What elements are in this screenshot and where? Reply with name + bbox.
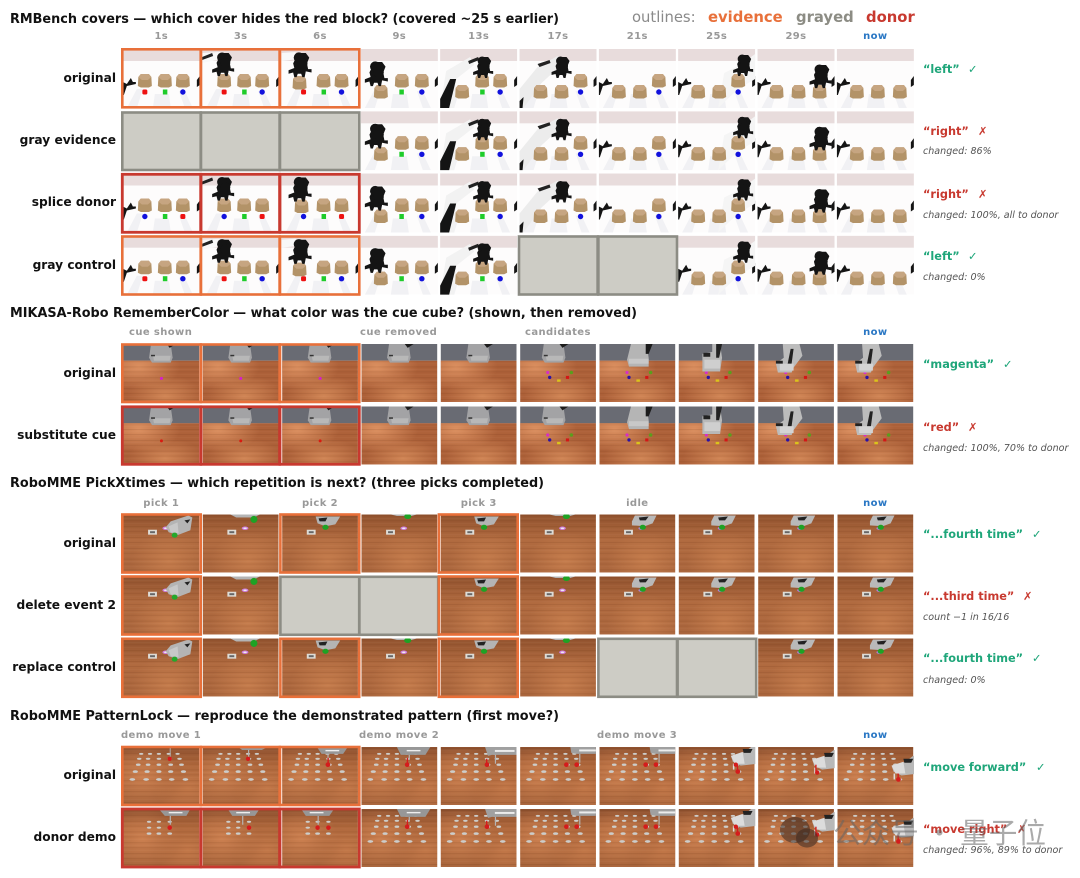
row: original: original [63,536,116,550]
row: gray evidence: “right” [923,125,969,138]
legend: outlines: evidence [708,9,783,26]
row: gray evidence [20,111,992,170]
row: donor demo: “move right” [923,823,1007,836]
row: delete event 2 [17,576,1032,635]
row: original: ✓ [1036,761,1045,774]
row: gray control [33,236,986,295]
timeline labels: cue shown [129,327,192,338]
row: original: original [63,768,116,782]
row: replace control [12,638,1041,697]
row: replace control: changed: 0% [923,675,986,686]
row: substitute cue: substitute cue [17,428,116,442]
timeline labels: 25s [706,31,727,42]
timeline labels [121,730,888,741]
title: MIKASA-Robo: MIKASA-Robo RememberColor — what color was the cue cube? (shown, then removed) [10,306,637,321]
timeline labels: demo move 2 [359,730,439,741]
panel: MIKASA-Robo RememberColor [10,306,1069,464]
row: splice donor: “right” [923,188,969,201]
row: original: ✓ [1003,358,1012,371]
timeline labels: 9s [392,31,406,42]
row: original: original [63,366,116,380]
row: original [63,514,1041,572]
row: original [63,49,977,108]
legend: outlines [632,9,915,26]
row: gray control: gray control [33,258,116,272]
row: delete event 2: ✗ [1023,590,1032,603]
timeline labels [143,498,888,509]
row: gray evidence: ✗ [978,125,987,138]
timeline labels: 3s [234,31,248,42]
row: donor demo [34,808,1063,867]
row: delete event 2: count −1 in 16/16 [923,612,1009,623]
row: substitute cue: ✗ [968,421,977,434]
timeline labels: 6s [313,31,327,42]
timeline labels: candidates [525,327,591,338]
row: original: “...fourth time” [923,528,1023,541]
timeline labels: pick 1 [143,498,179,509]
row: original: “left” [923,63,960,76]
row: donor demo: ✗ [1017,823,1026,836]
row: replace control: “...fourth time” [923,652,1023,665]
timeline labels: idle [626,498,649,509]
row: splice donor: changed: 100%, all to donor [923,210,1059,221]
row: substitute cue: changed: 100%, 70% to donor [923,443,1069,454]
row: original: “move forward” [923,761,1026,774]
row: gray evidence: changed: 86% [923,146,992,157]
row: splice donor: ✗ [978,188,987,201]
timeline labels: demo move 1 [121,730,201,741]
row: replace control: ✓ [1032,652,1041,665]
row: gray control: changed: 0% [923,272,986,283]
timeline labels: now [863,730,888,741]
legend: outlines: outlines: [632,9,696,26]
row: gray control: “left” [923,250,960,263]
row: original: original [63,71,116,85]
timeline labels: 1s [154,31,168,42]
row: splice donor [32,174,1059,232]
timeline labels: cue removed [360,327,437,338]
panel: RoboMME PickXtimes [10,476,1041,697]
timeline labels: pick 2 [302,498,338,509]
legend: outlines: donor [866,9,915,26]
legend: outlines: grayed [796,9,854,26]
row: donor demo: donor demo [34,830,116,844]
timeline labels: 13s [468,31,489,42]
row: original: ✓ [1032,528,1041,541]
row: gray control: ✓ [968,250,977,263]
title: RMBench covers: RMBench covers — which cover hides the red block? (covered ~25 s earlier) [10,12,559,27]
row: original [63,746,1045,805]
row: original: “magenta” [923,358,994,371]
timeline labels: 17s [547,31,569,42]
timeline labels: now [863,498,888,509]
row: donor demo: changed: 96%, 89% to donor [923,845,1063,856]
row: delete event 2: delete event 2 [17,598,116,612]
row: original: ✓ [968,63,977,76]
row: splice donor: splice donor [32,195,116,209]
row: substitute cue: “red” [923,421,959,434]
timeline labels: now [863,31,888,42]
timeline labels: demo move 3 [597,730,677,741]
row: delete event 2: “...third time” [923,590,1014,603]
watermark: 公众号 · 量子位 [833,811,1046,852]
title: RoboMME PatternLock: RoboMME PatternLock — reproduce the demonstrated pattern (first move?) [10,709,559,724]
row: substitute cue [17,406,1069,464]
timeline labels [154,31,888,42]
row: gray evidence: gray evidence [20,133,116,147]
timeline labels: 29s [785,31,807,42]
timeline labels: pick 3 [461,498,497,509]
timeline labels [129,327,888,338]
panel: RoboMME PatternLock [10,709,1063,867]
panel: RMBench covers [10,9,1059,295]
timeline labels: now [863,327,888,338]
row: replace control: replace control [12,660,116,674]
title: RoboMME PickXtimes: RoboMME PickXtimes — which repetition is next? (three picks completed) [10,476,544,491]
row: original [63,344,1012,402]
timeline labels: 21s [627,31,648,42]
